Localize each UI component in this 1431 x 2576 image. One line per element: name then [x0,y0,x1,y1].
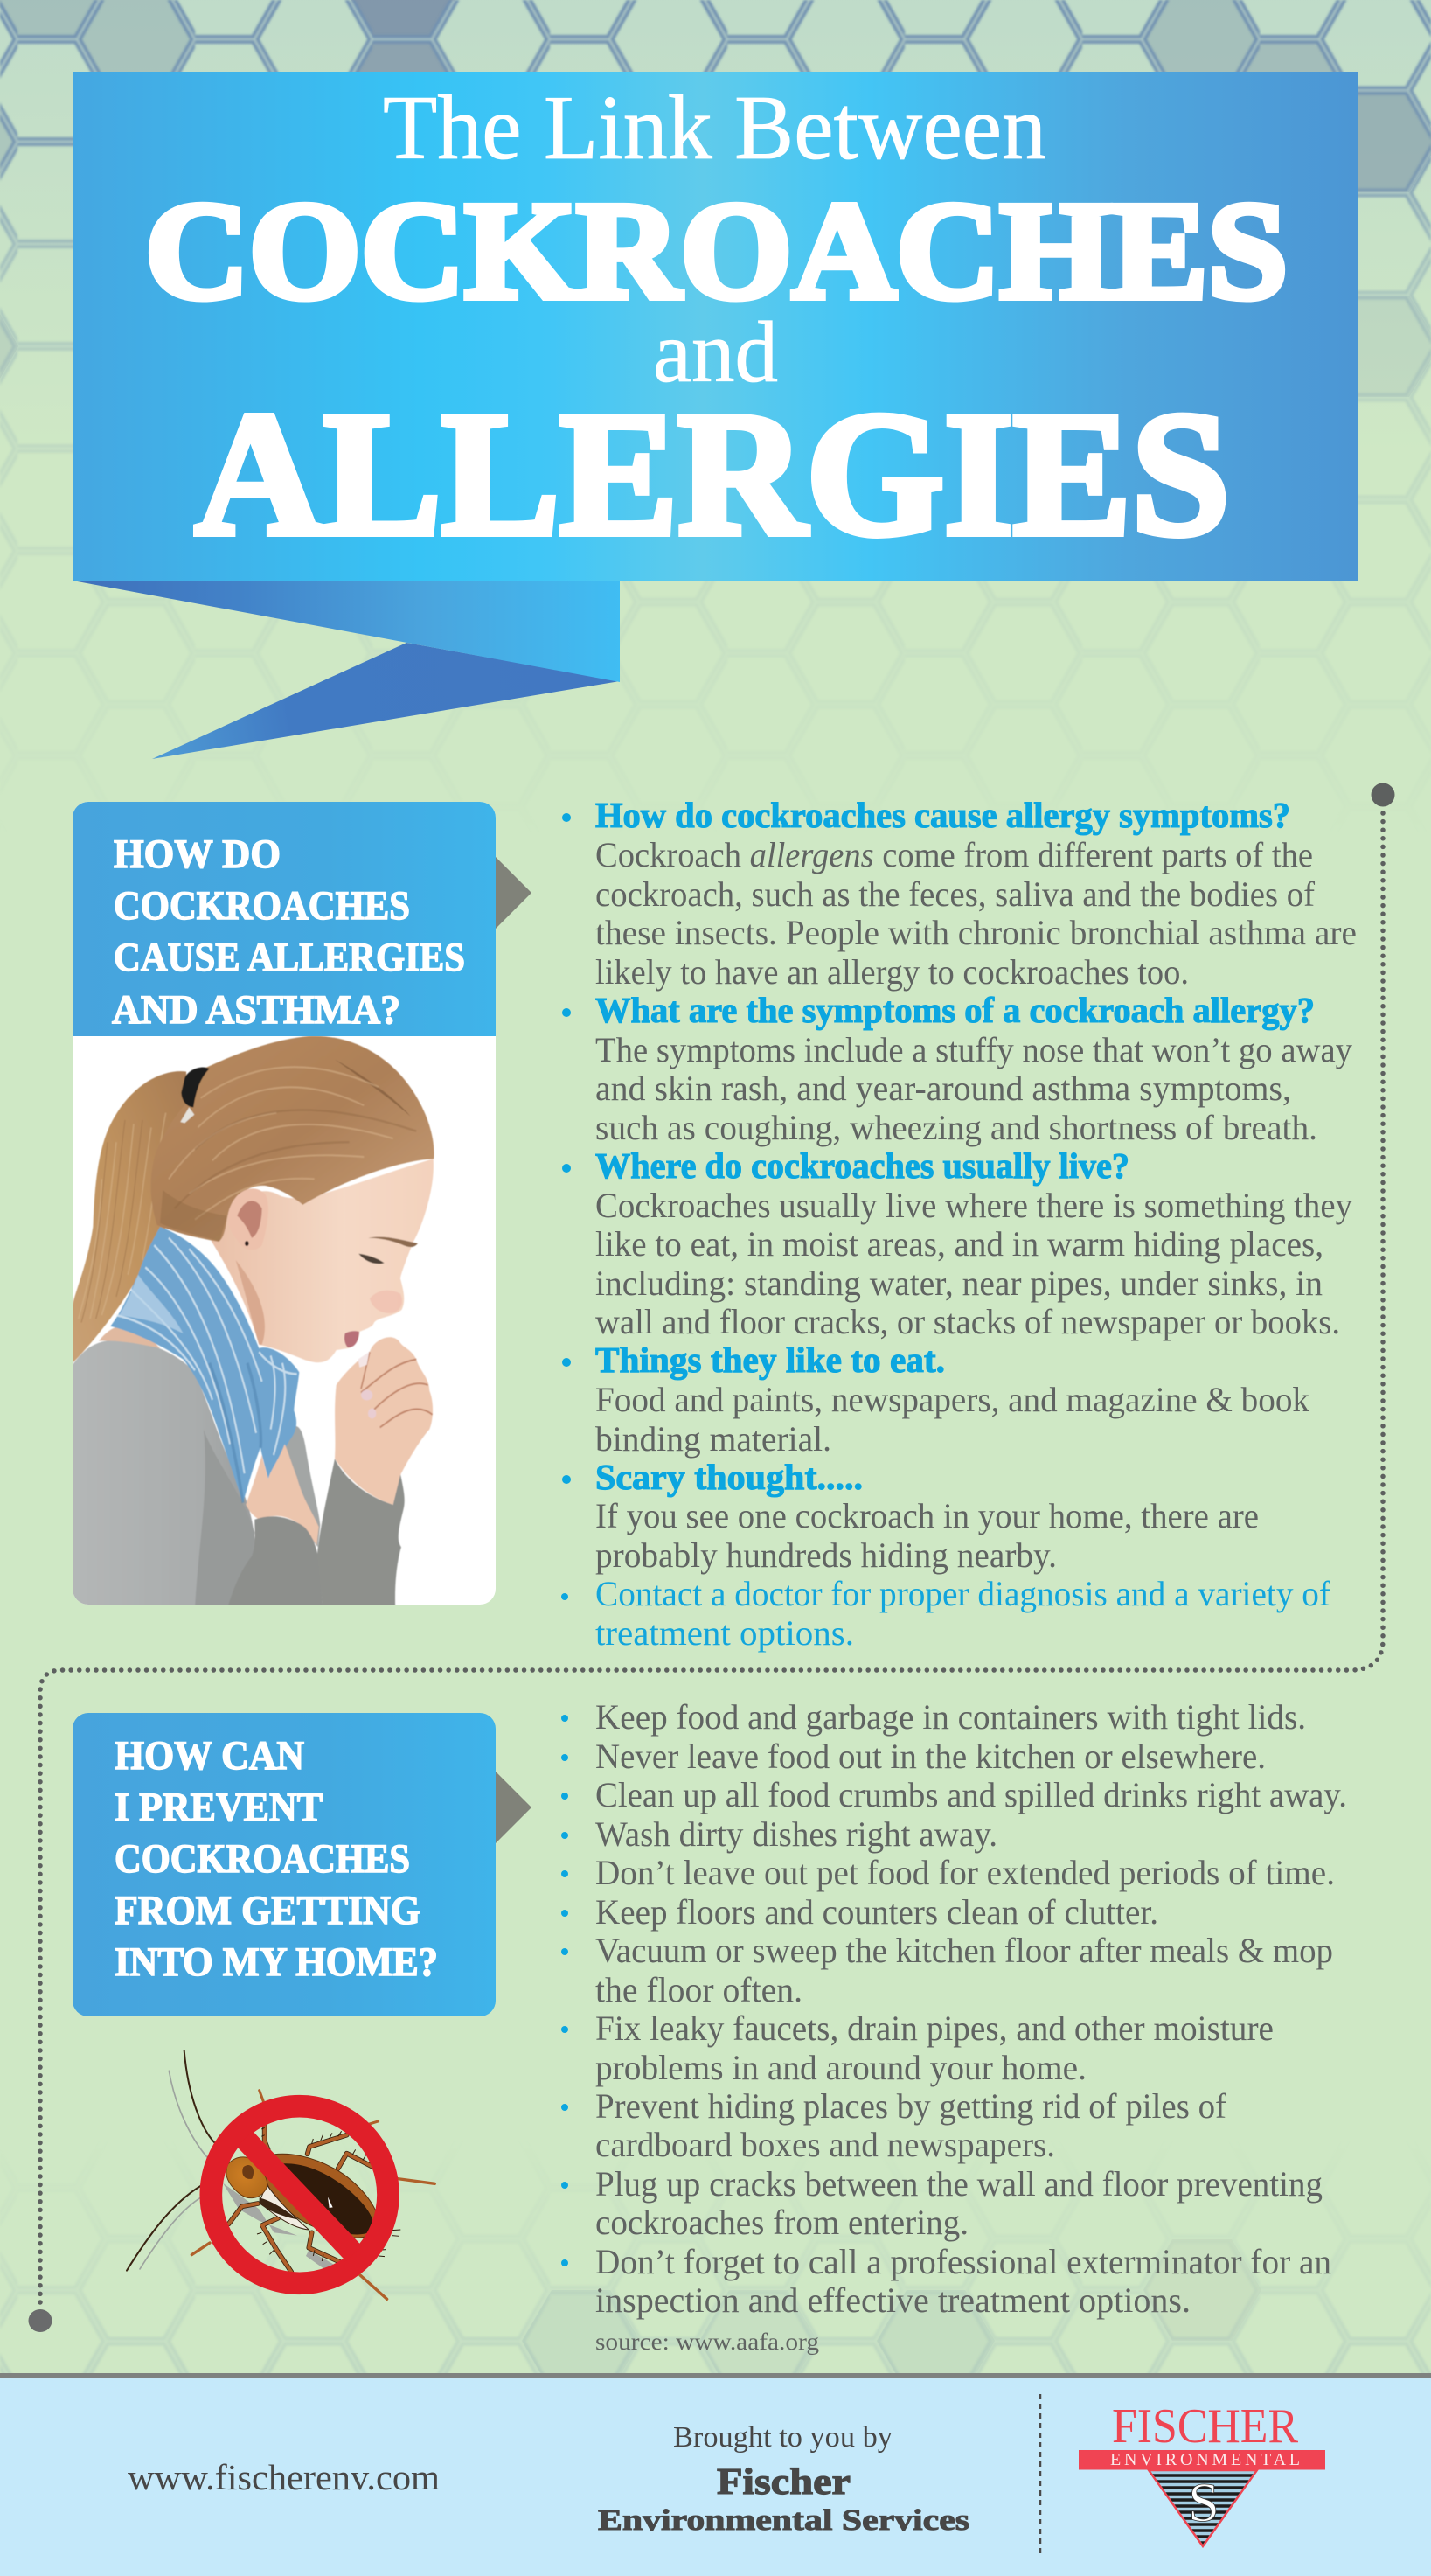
heading: how do cockroaches cause allergies and asthma: COCKROACHES [114,883,410,929]
neck skin [99,1325,160,1348]
question: what are the symptoms of a cockroach allergy: The symptoms include a stuffy nose that won’t go away [595,1030,1352,1069]
heading: how do cockroaches cause allergies and asthma [112,832,465,1033]
brought to you by credit: Brought to you by [673,2421,893,2454]
question: things they like to eat: Food and paints, newspapers, and magazine & book [595,1380,1309,1419]
leg spines [257,2127,400,2261]
body shell [263,2154,379,2238]
tips text: Wash dirty dishes right away. [595,1814,997,1854]
tips text: cockroaches from entering. [595,2203,969,2242]
footer band [0,2373,1431,2576]
question: where do cockroaches usually live [595,1145,1352,1341]
panel one white body [73,802,496,1605]
tips text: Never leave food out in the kitchen or elsewhere. [595,1737,1266,1776]
heading: how can i prevent cockroaches: I PREVENT [115,1785,323,1830]
photo: woman coughing [73,1036,434,1610]
lips [344,1331,359,1347]
title banner [73,72,1358,581]
question: things they like to eat [595,1340,1309,1459]
heading: how can i prevent cockroaches: COCKROACHES [115,1836,410,1882]
question: scary thought: If you see one cockroach in your home, there are [595,1496,1259,1535]
head [226,2157,267,2198]
sleeve lower arm [227,1516,323,1610]
question: where do cockroaches usually live: Where do cockroaches usually live? [595,1145,1129,1186]
logo: Fischer Environmental [1079,2399,1325,2548]
heading: how do cockroaches cause allergies and asthma: HOW DO [114,832,281,877]
tips text: Clean up all food crumbs and spilled drinks right away. [595,1775,1347,1814]
dotted connector line [28,783,1395,2332]
panel two blue box [73,1713,496,2016]
brought to you by credit: Environmental Services [598,2504,969,2537]
logo: Fischer Environmental: ENVIRONMENTAL [1110,2450,1300,2469]
hair ponytail [73,1071,188,1363]
tips text: problems in and around your home. [595,2048,1087,2087]
panel one blue heading box [73,802,496,1036]
tips text: Plug up cracks between the wall and floor preventing [595,2164,1323,2204]
callout: contact a doctor [595,1574,1331,1653]
question: what are the symptoms of a cockroach allergy [595,990,1352,1147]
question: how do cockroaches cause allergy symptoms: these insects. People with chronic bronchial asthma are [595,913,1357,952]
tips text: cardboard boxes and newspapers. [595,2125,1055,2164]
question: how do cockroaches cause allergy symptoms [595,795,1357,992]
question: scary thought: probably hundreds hiding nearby. [595,1535,1057,1575]
question: things they like to eat: Things they like to eat. [595,1340,945,1380]
logo: Fischer Environmental: FISCHER [1112,2399,1299,2454]
tips text: Fix leaky faucets, drain pipes, and other moisture [595,2009,1274,2048]
hand on chest [246,1444,319,1545]
heading: how can i prevent cockroaches: INTO MY HOME? [115,1939,438,1985]
wing highlight [260,2184,309,2230]
arrow: panel one pointer [496,857,531,929]
tips text: the floor often. [595,1970,802,2009]
tips text [595,1697,1347,2320]
question: where do cockroaches usually live: Cockroaches usually live where there is something they [595,1186,1352,1225]
panel: how can I prevent cockroaches [73,1713,531,2016]
tips text: Keep floors and counters clean of clutter. [595,1892,1158,1932]
list bullets [561,813,571,1600]
sweater back [73,1340,255,1610]
question: what are the symptoms of a cockroach allergy: and skin rash, and year-around asthma symptoms, [595,1069,1291,1108]
panel: how do cockroaches cause allergies [73,802,531,1610]
text block: prevention tips list [561,1697,1347,2355]
tips text: Prevent hiding places by getting rid of piles of [595,2086,1227,2126]
question: scary thought [595,1457,1259,1575]
question: where do cockroaches usually live: including: standing water, near pipes, under sinks, in [595,1264,1323,1303]
tips text: Don’t forget to call a professional exterminator for an [595,2242,1331,2281]
question: how do cockroaches cause allergy symptoms: How do cockroaches cause allergy symptoms? [595,795,1290,835]
title line: COCKROACHES: COCKROACHES [145,174,1288,328]
heading: how do cockroaches cause allergies and asthma: CAUSE ALLERGIES [114,935,465,980]
prohibition ring and slash [211,2106,388,2283]
brought to you by credit [598,2421,969,2537]
question: how do cockroaches cause allergy symptoms: cockroach, such as the feces, saliva and the bodies of [595,874,1316,914]
sleeve right arm [317,1459,405,1610]
callout: contact a doctor: treatment options. [595,1613,854,1653]
hair top of head [151,1036,434,1242]
brought to you by credit: Fischer [717,2462,851,2503]
tips text: Keep food and garbage in containers with tight lids. [595,1697,1306,1737]
leg outlines [229,2125,372,2272]
question: where do cockroaches usually live: like to eat, in moist areas, and in warm hiding places, [595,1224,1323,1264]
hair band [181,1067,210,1107]
banner ribbon tail [73,581,620,759]
source note: source: www.aafa.org [595,2329,819,2355]
tips text: Vacuum or sweep the kitchen floor after meals & mop [595,1931,1333,1970]
question: things they like to eat: binding material. [595,1419,831,1459]
website address: www.fischerenv.com [128,2457,440,2497]
question: what are the symptoms of a cockroach allergy: What are the symptoms of a cockroach allergy? [595,990,1315,1030]
ear [228,1188,268,1250]
icon: cockroach with prohibition sign [127,2050,434,2299]
fist [335,1337,433,1505]
tips text: inspection and effective treatment options. [595,2280,1191,2320]
logo: Fischer Environmental: S [1188,2471,1219,2533]
question: how do cockroaches cause allergy symptoms: likely to have an allergy to cockroaches too. [595,952,1189,992]
legs [191,2091,434,2299]
callout: contact a doctor: Contact a doctor for proper diagnosis and a variety of [595,1574,1331,1613]
question: scary thought: Scary thought..... [595,1457,863,1497]
heading: how can i prevent cockroaches: HOW CAN [115,1733,304,1779]
body shadow [223,2183,297,2236]
question: where do cockroaches usually live: wall and floor cracks, or stacks of newspaper or books. [595,1302,1340,1341]
antennae [127,2050,214,2271]
question: what are the symptoms of a cockroach allergy: such as coughing, wheezing and shortness of breath. [595,1108,1317,1147]
eye and brow [358,1254,385,1264]
arrow: panel two pointer [496,1772,531,1843]
prevention bullets [561,1715,568,2266]
question: how do cockroaches cause allergy symptoms: Cockroach allergens come from different parts of the [595,835,1313,874]
heading: how can i prevent cockroaches: FROM GETTING [115,1888,420,1933]
scarf [110,1227,299,1503]
title line: The Link Between: The Link Between [383,76,1046,178]
title line: ALLERGIES: ALLERGIES [195,375,1230,572]
face and neck [210,1159,434,1362]
heading: how do cockroaches cause allergies and asthma: AND ASTHMA? [112,987,400,1033]
vertical dashed divider [1039,2394,1041,2556]
chest behind [282,1426,320,1547]
title line: and: and [653,303,778,400]
text block: allergy questions and answers [561,795,1357,1653]
tips text: Don’t leave out pet food for extended periods of time. [595,1853,1335,1892]
heading: how can i prevent cockroaches [115,1733,438,1985]
